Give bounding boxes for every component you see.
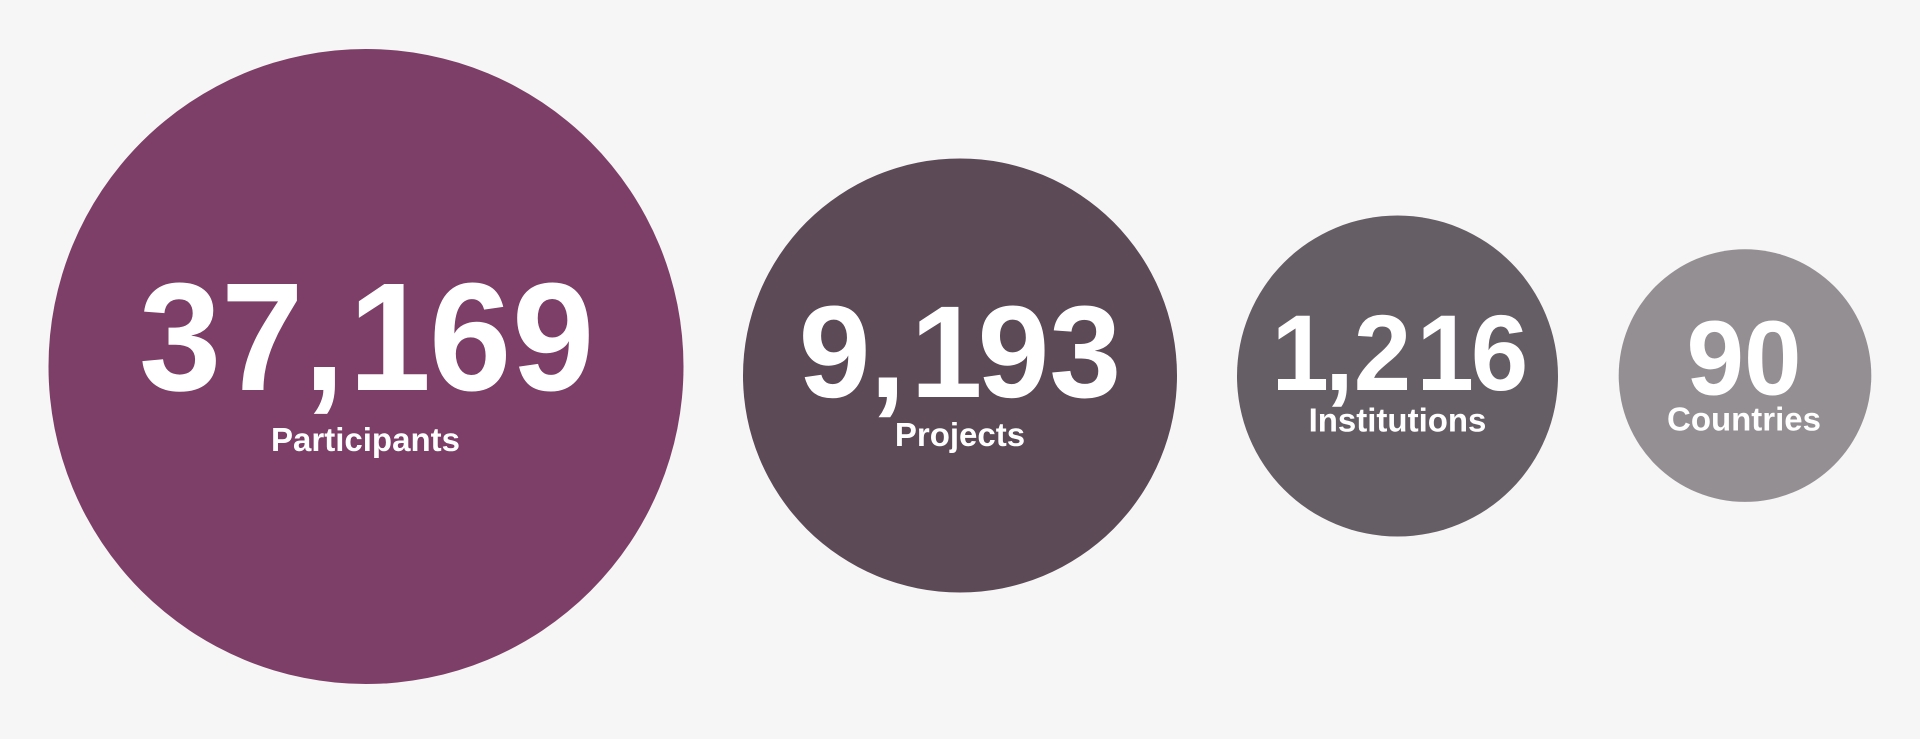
number: 37,169: 37,169 [139, 250, 594, 423]
panel: participants statistic [48, 49, 684, 684]
panel: countries statistic [1619, 249, 1871, 502]
label: Countries: Countries [1667, 400, 1821, 438]
number: 9,193: 9,193 [799, 278, 1121, 425]
label: Participants: Participants [271, 421, 460, 458]
circle: projects [743, 158, 1177, 592]
circle: institutions [1237, 216, 1558, 536]
number: 1,216: 1,216 [1272, 293, 1528, 414]
label: Institutions: Institutions [1309, 402, 1486, 438]
number: 90: 90 [1686, 300, 1802, 418]
panel: institutions statistic [1237, 216, 1558, 536]
circle: countries [1619, 249, 1871, 502]
panel: projects statistic [743, 158, 1177, 592]
label: Projects: Projects [895, 416, 1025, 453]
circle: participants [48, 49, 684, 684]
